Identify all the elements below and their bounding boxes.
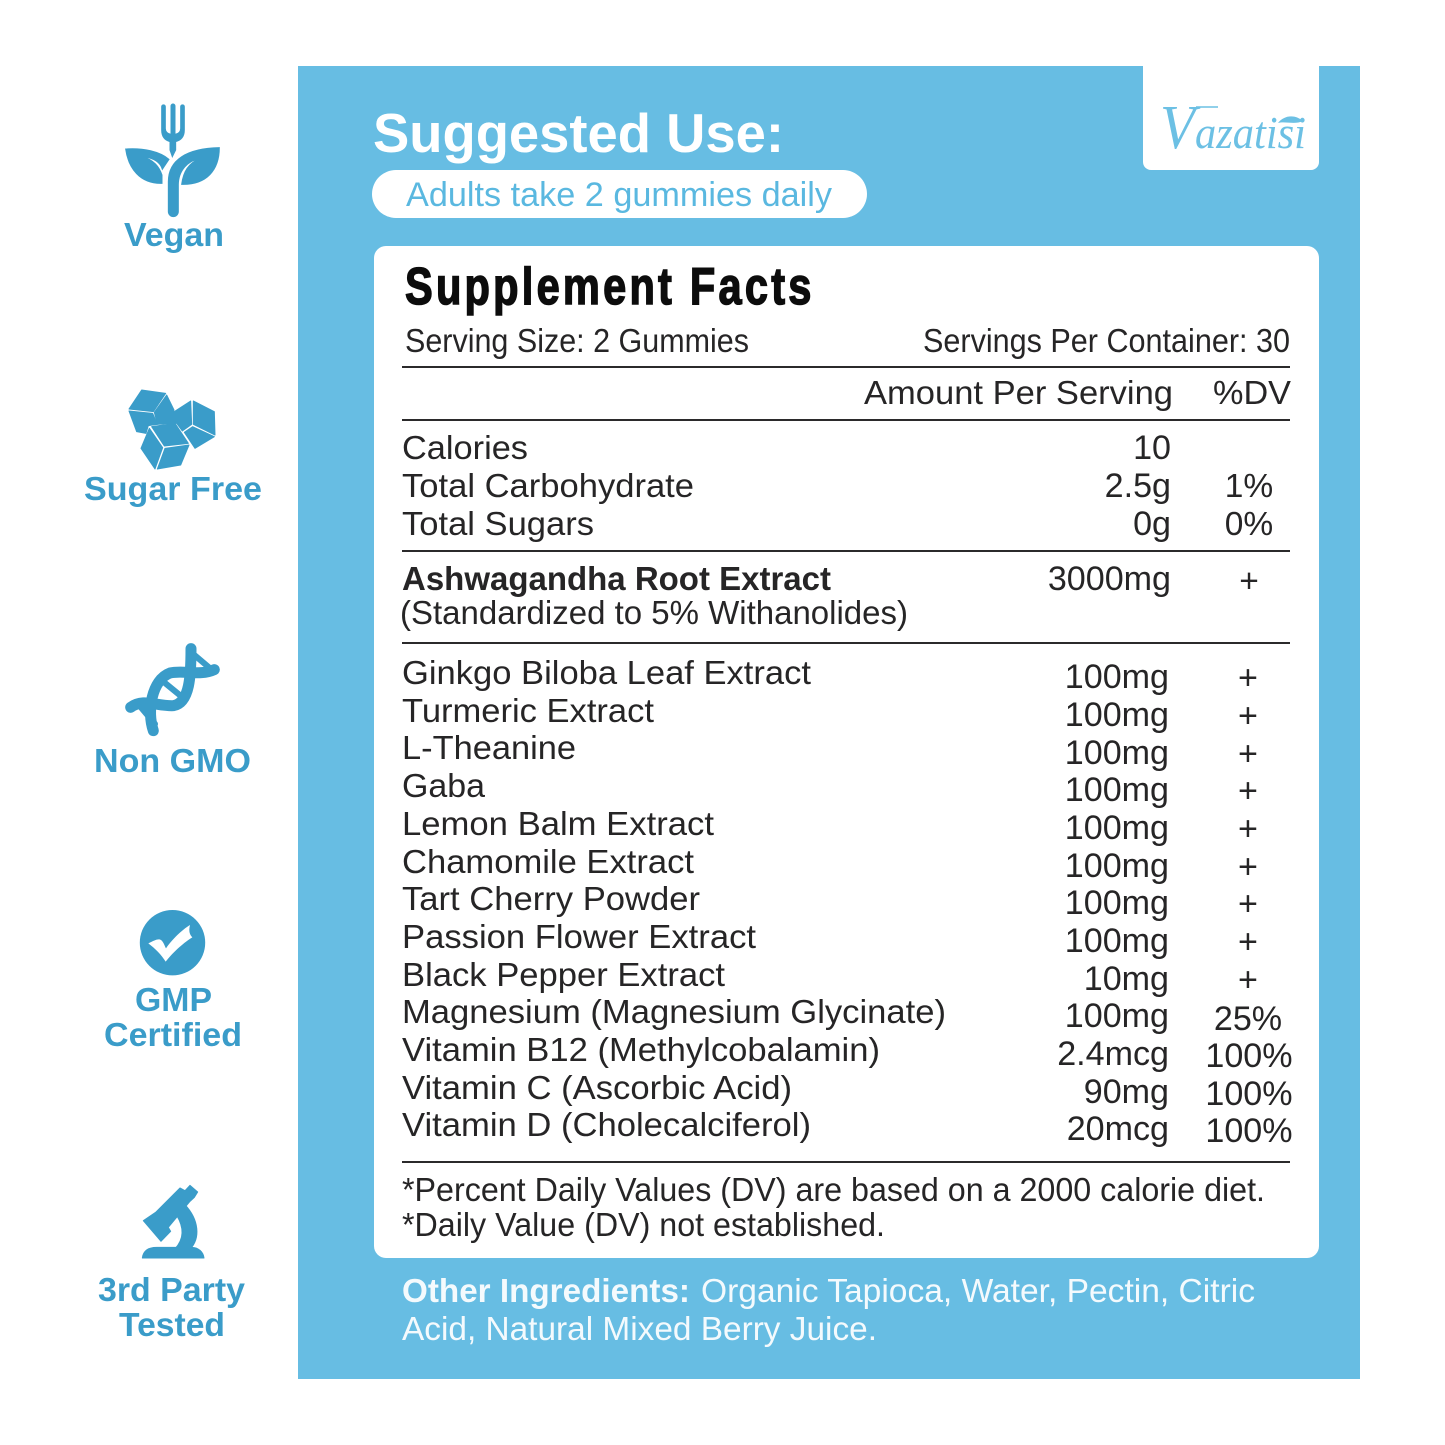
label: 3rd party tested: 3rd Party: [98, 1271, 246, 1308]
ingredient daily values: [1205, 659, 1293, 1150]
ingredient daily values: 100%: [1205, 1112, 1293, 1150]
ingredient names: Vitamin C (Ascorbic Acid): [402, 1070, 792, 1107]
ingredient amounts: 20mcg: [1067, 1110, 1169, 1148]
ingredient names: Tart Cherry Powder: [402, 881, 700, 918]
badge: sugar free: [84, 390, 262, 507]
ingredient amounts: 100mg: [1065, 809, 1169, 847]
table header: Amount Per Serving: [864, 375, 1173, 412]
badge: gmp certified: [104, 910, 242, 1053]
ingredient daily values: 25%: [1214, 1000, 1282, 1038]
rows: calories and carbohydrates: 2.5g: [1105, 467, 1171, 505]
rows: calories and carbohydrates: 0%: [1225, 506, 1273, 543]
badge: non gmo: [94, 649, 251, 779]
label: non gmo: Non GMO: [94, 742, 251, 779]
ingredient amounts: 10mg: [1084, 960, 1169, 998]
icon: check circle: [140, 910, 205, 975]
ingredient daily values: +: [1238, 772, 1258, 810]
ingredient amounts: 90mg: [1084, 1073, 1169, 1111]
other ingredients: Other Ingredients:: [402, 1273, 690, 1310]
pill: dosage: [372, 170, 867, 218]
logo tab: [1143, 66, 1319, 170]
heading: supplement facts: Supplement Facts: [405, 257, 811, 315]
ingredient names: Magnesium (Magnesium Glycinate): [402, 994, 946, 1031]
heading: suggested use: Suggested Use:: [373, 102, 784, 164]
panel: blue background: [298, 66, 1360, 1379]
ingredient amounts: 100mg: [1065, 997, 1169, 1035]
footnotes: *Percent Daily Values (DV) are based on a 2000 calorie diet.: [402, 1172, 1265, 1209]
ingredient names: Vitamin B12 (Methylcobalamin): [402, 1032, 880, 1069]
label: 3rd party tested: [98, 1271, 246, 1343]
footnotes: [402, 1172, 1265, 1244]
row: ashwagandha: 3000mg: [1048, 560, 1171, 598]
ingredient daily values: 100%: [1205, 1075, 1293, 1113]
other ingredients: Organic Tapioca, Water, Pectin, Citric: [701, 1273, 1255, 1310]
footnotes: *Daily Value (DV) not established.: [402, 1207, 885, 1244]
ingredient amounts: 100mg: [1065, 771, 1169, 809]
ingredient names: Lemon Balm Extract: [402, 806, 715, 843]
ingredient daily values: +: [1238, 659, 1258, 697]
other ingredients: Acid, Natural Mixed Berry Juice.: [402, 1311, 877, 1348]
icon: dna helix: [131, 649, 214, 731]
ingredient names: L-Theanine: [402, 730, 576, 767]
rows: calories and carbohydrates: [402, 429, 1273, 543]
serving info: Serving Size: 2 Gummies: [405, 323, 749, 360]
table header: %DV: [1213, 375, 1292, 412]
badge: 3rd party tested: [98, 1185, 246, 1343]
badge: vegan: [124, 104, 224, 253]
ingredient names: Black Pepper Extract: [402, 957, 726, 994]
ingredient amounts: 100mg: [1065, 922, 1169, 960]
label: gmp certified: GMP: [135, 981, 212, 1018]
panel: supplement facts card: [374, 246, 1319, 1258]
ingredient amounts: 100mg: [1065, 658, 1169, 696]
rows: calories and carbohydrates: 1%: [1225, 468, 1273, 505]
ingredient names: Ginkgo Biloba Leaf Extract: [402, 655, 812, 692]
icon: sugar cubes: [129, 390, 215, 469]
ingredient daily values: +: [1238, 885, 1258, 923]
ingredient daily values: +: [1238, 810, 1258, 848]
ingredient names: [402, 655, 946, 1144]
ingredient daily values: +: [1238, 697, 1258, 735]
ingredient daily values: 100%: [1205, 1037, 1293, 1075]
other ingredients: [402, 1273, 1255, 1348]
ingredient daily values: +: [1238, 961, 1258, 999]
rows: calories and carbohydrates: 10: [1133, 429, 1171, 467]
row: ashwagandha: (Standardized to 5% Withanolides): [400, 595, 908, 632]
ingredient amounts: 100mg: [1065, 696, 1169, 734]
ingredient names: Passion Flower Extract: [402, 919, 757, 956]
ingredient names: Vitamin D (Cholecalciferol): [402, 1107, 811, 1144]
ingredient amounts: 2.4mcg: [1057, 1035, 1169, 1073]
ingredient names: Turmeric Extract: [402, 693, 655, 730]
ingredient daily values: +: [1238, 735, 1258, 773]
ingredient names: Chamomile Extract: [402, 844, 695, 881]
icon: fork and leaves: [126, 104, 219, 217]
row: ashwagandha: +: [1239, 563, 1259, 600]
label: 3rd party tested: Tested: [119, 1306, 225, 1343]
ingredient daily values: +: [1238, 848, 1258, 886]
serving info: [405, 323, 1290, 360]
rows: calories and carbohydrates: Total Sugars: [402, 506, 594, 543]
serving info: Servings Per Container: 30: [923, 323, 1290, 360]
ingredient amounts: 100mg: [1065, 847, 1169, 885]
rows: calories and carbohydrates: Calories: [402, 430, 528, 467]
label: sugar free: Sugar Free: [84, 470, 262, 507]
label: vegan: Vegan: [124, 216, 224, 253]
ingredient names: Gaba: [402, 768, 485, 805]
pill: dosage: Adults take 2 gummies daily: [406, 176, 832, 214]
ingredient amounts: [1057, 658, 1169, 1148]
ingredient amounts: 100mg: [1065, 734, 1169, 772]
label: gmp certified: [104, 981, 242, 1053]
ingredient amounts: 100mg: [1065, 884, 1169, 922]
rows: calories and carbohydrates: 0g: [1133, 505, 1171, 543]
row: ashwagandha: [400, 560, 1259, 632]
icon: microscope: [142, 1185, 204, 1258]
label: gmp certified: Certified: [104, 1016, 242, 1053]
logo: Vazatisi: Vazatisi: [1160, 94, 1306, 162]
ingredient daily values: +: [1238, 923, 1258, 961]
rows: calories and carbohydrates: Total Carbohydrate: [402, 468, 694, 505]
row: ashwagandha: Ashwagandha Root Extract: [402, 561, 831, 598]
